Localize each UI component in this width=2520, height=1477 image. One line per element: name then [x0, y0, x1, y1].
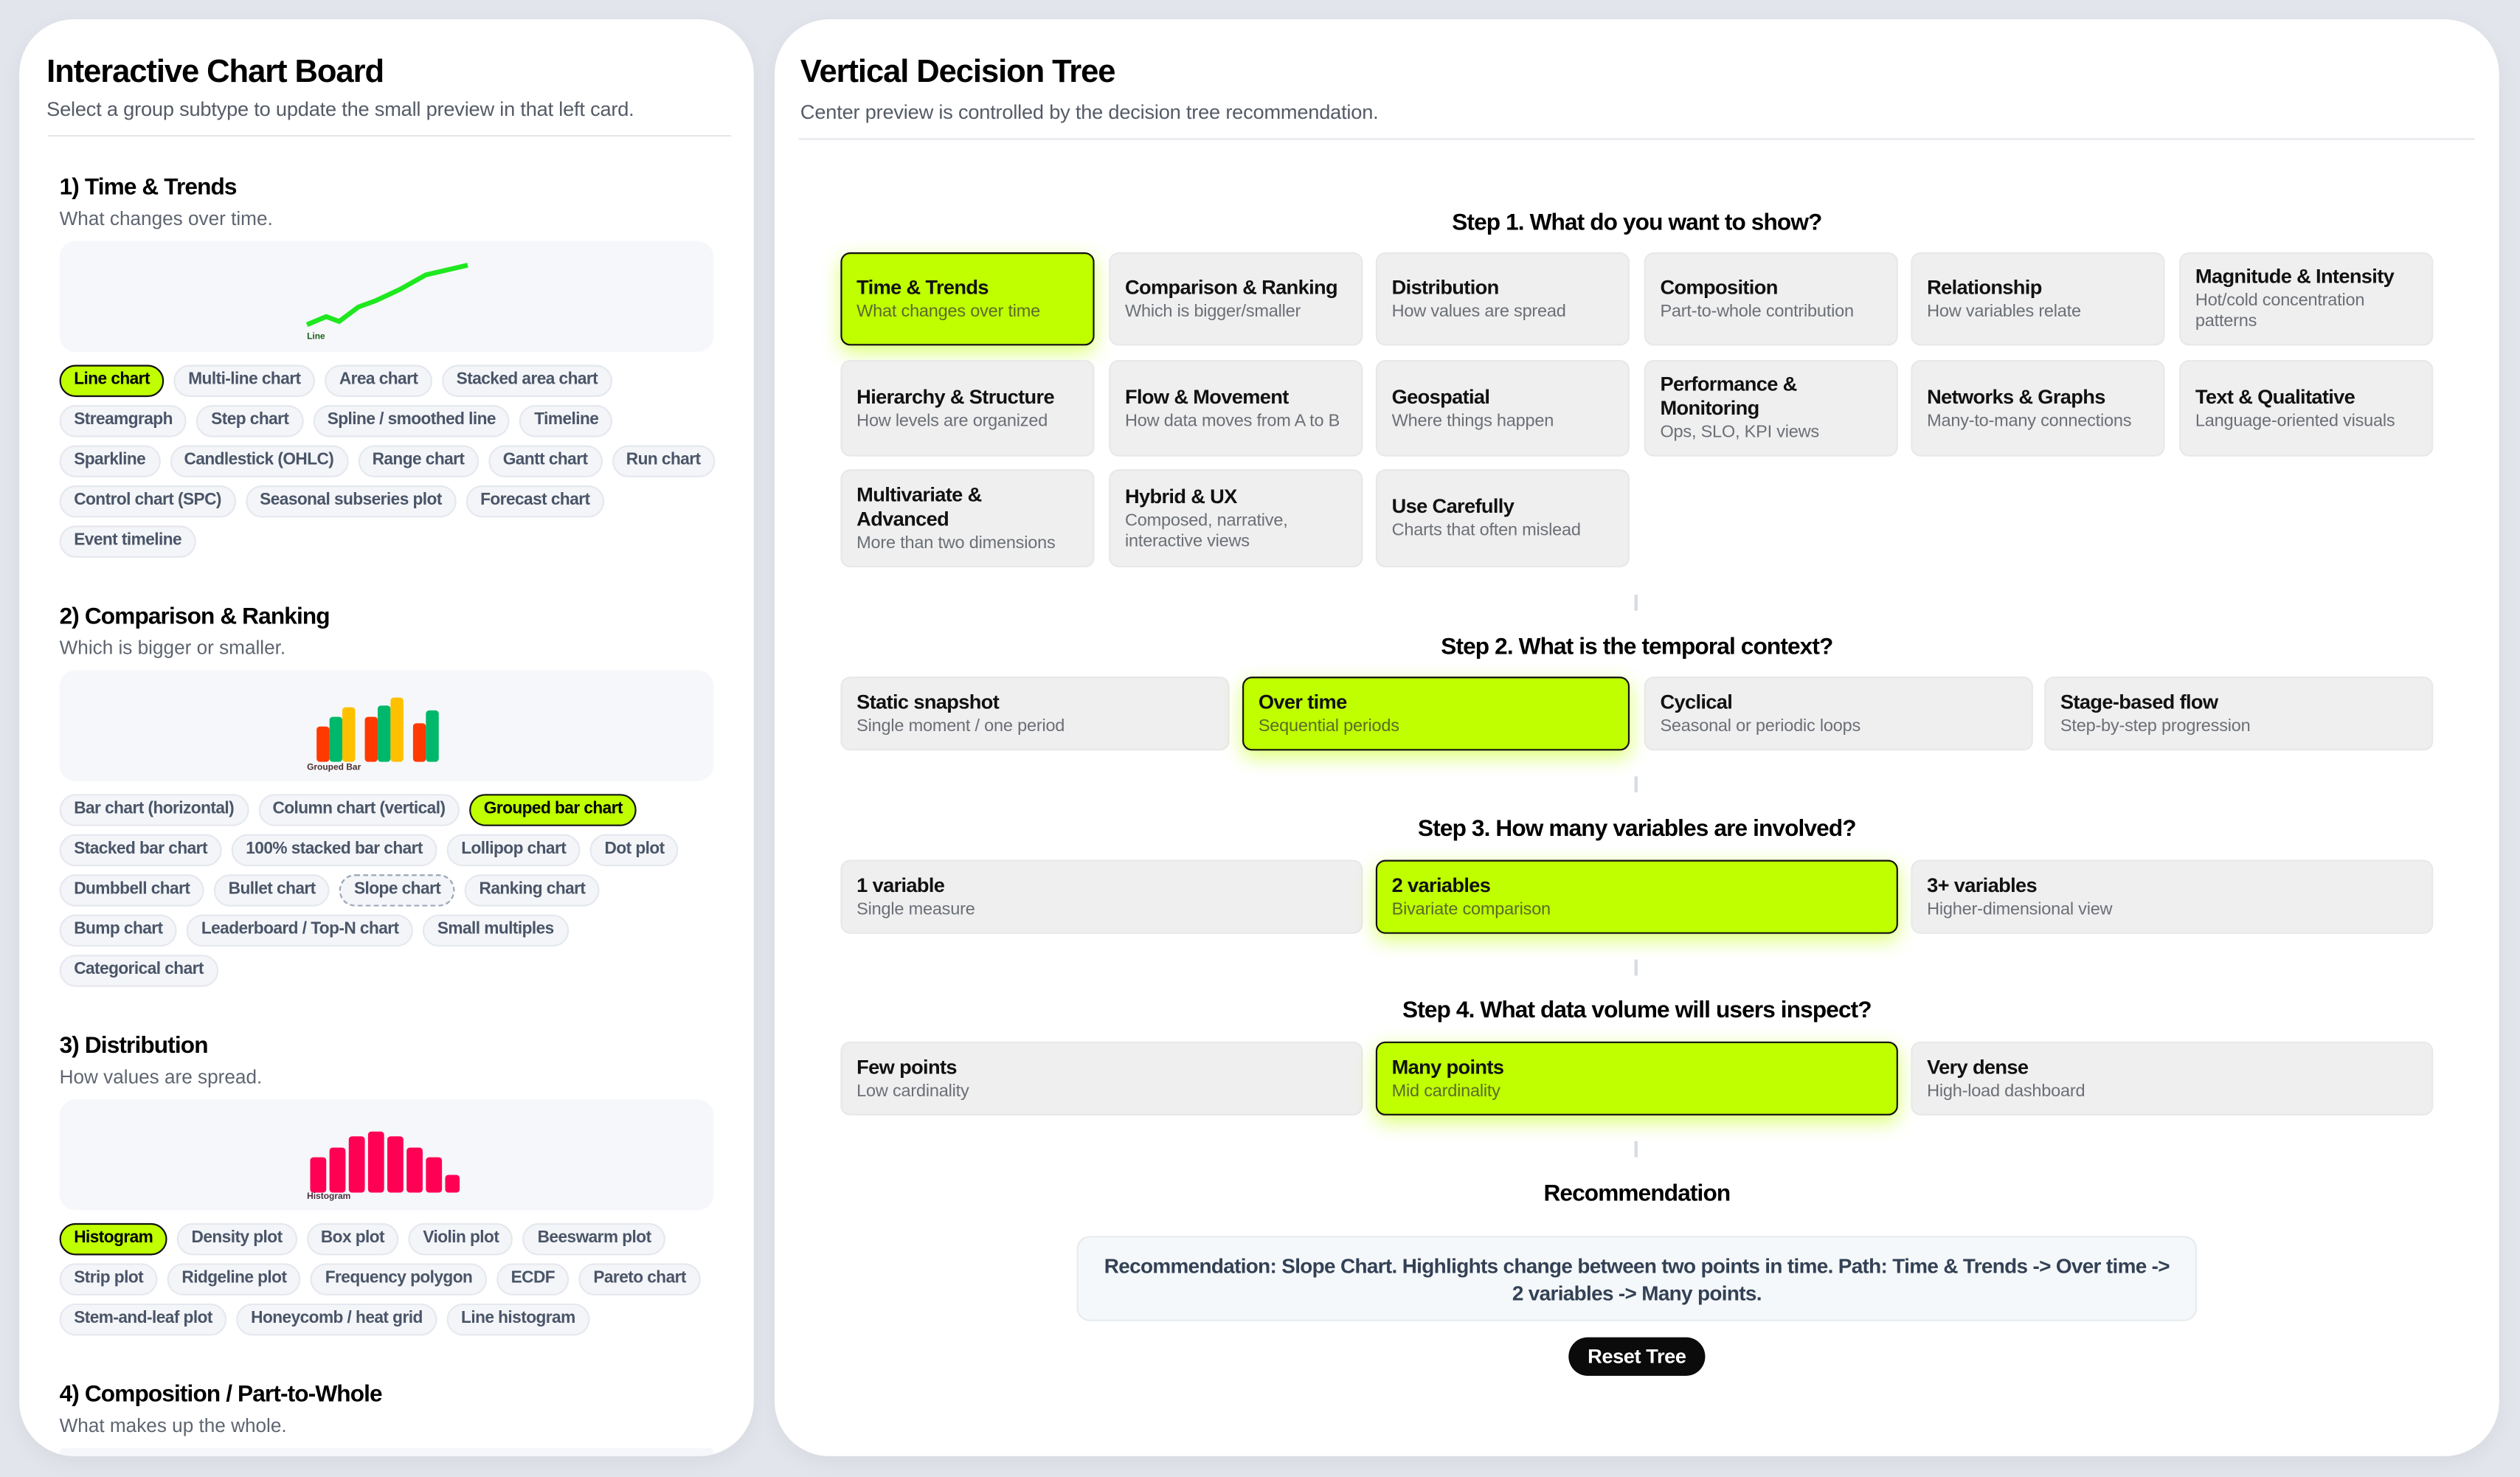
step 1 options: Comparison & Ranking [1125, 276, 1337, 298]
step 1 options: Text & Qualitative [2195, 385, 2355, 407]
step 1 options: Magnitude & Intensity [2195, 265, 2394, 288]
step 1 options: Hot/cold concentration patterns [2195, 291, 2364, 331]
title: Interactive Chart Board: Interactive Chart Board [46, 55, 384, 90]
step 1 options: What changes over time [856, 301, 1040, 321]
chips: distribution: Histogram [74, 1230, 153, 1248]
step 3 options [841, 852, 2433, 955]
section: Composition: 4) Composition / Part-to-Whole [60, 1383, 382, 1408]
step 1 options: Hierarchy & Structure [856, 385, 1054, 407]
chips: comparison: Ranking chart [480, 881, 585, 899]
step 1 options: Where things happen [1392, 411, 1554, 430]
chips: distribution: Strip plot [74, 1270, 143, 1287]
chips: distribution: Honeycomb / heat grid [251, 1310, 423, 1327]
chips: distribution: Line histogram [461, 1310, 575, 1327]
recommendation box: Recommendation: Slope Chart. Highlights change between two points in time. Path: Time & Trends -> Over time -> [1104, 1253, 2170, 1277]
chips: comparison [59, 794, 679, 987]
section: Distribution: How values are spread. [60, 1065, 262, 1088]
recommendation heading: Recommendation [1543, 1181, 1730, 1207]
recommendation box [1077, 1236, 2197, 1321]
chips: distribution: Frequency polygon [325, 1270, 472, 1287]
chips: comparison: Bump chart [74, 921, 163, 938]
panel: interactive chart board [19, 19, 754, 1456]
chips: comparison: Categorical chart [74, 961, 204, 979]
step 1 options: How variables relate [1927, 301, 2081, 321]
chips: comparison: Slope chart [354, 881, 440, 899]
step 1 options: Distribution [1392, 276, 1499, 298]
chips: distribution: Stem-and-leaf plot [74, 1310, 212, 1327]
chips: time & trends: Event timeline [74, 532, 181, 550]
chips: distribution: ECDF [511, 1270, 555, 1287]
preview: line chart: Line [307, 331, 325, 342]
chips: comparison: Dot plot [605, 840, 665, 858]
step 1 options: Composition [1660, 276, 1778, 298]
chips: comparison: Column chart (vertical) [272, 800, 445, 818]
step 2 options: Static snapshot [856, 691, 999, 713]
chips: time & trends: Sparkline [74, 452, 145, 469]
chips: distribution: Beeswarm plot [538, 1230, 651, 1248]
chips: distribution: Box plot [321, 1230, 384, 1248]
step 1 options: Composed, narrative, interactive views [1125, 511, 1288, 550]
step 4 options [841, 1034, 2433, 1136]
step 4 options: High-load dashboard [1927, 1081, 2085, 1100]
chips: time & trends: Step chart [211, 412, 288, 429]
chips: comparison: Bar chart (horizontal) [74, 800, 234, 818]
step 2 heading: Step 2. What is the temporal context? [1441, 635, 1832, 660]
step 3 options: Bivariate comparison [1392, 899, 1551, 919]
chips: distribution [59, 1223, 701, 1335]
title: Vertical Decision Tree: Vertical Decision Tree [800, 55, 1115, 90]
step 1 options: How values are spread [1392, 301, 1566, 321]
step 1 options: Part-to-whole contribution [1660, 301, 1854, 321]
button: Reset Tree: Reset Tree [1588, 1345, 1686, 1368]
chips: comparison: Lollipop chart [461, 840, 566, 858]
step 1 options: More than two dimensions [856, 533, 1056, 552]
chips: time & trends: Streamgraph [74, 412, 173, 429]
section: Time & Trends: 1) Time & Trends [60, 175, 237, 201]
step 1 options: Time & Trends [856, 276, 989, 298]
step 1 options: Language-oriented visuals [2195, 411, 2395, 430]
chips: time & trends: Range chart [373, 452, 464, 469]
chips: time & trends: Run chart [626, 452, 701, 469]
chips: comparison: Small multiples [437, 921, 554, 938]
preview: histogram: Histogram [307, 1191, 350, 1201]
section: Composition: What makes up the whole. [60, 1414, 287, 1437]
step 1 options: How data moves from A to B [1125, 411, 1340, 430]
step 2 options: Over time [1259, 691, 1347, 713]
subtitle: Select a group subtype to update the small preview in that left card. [46, 98, 634, 120]
step 1 options: Charts that often mislead [1392, 521, 1581, 540]
step 1 options: Performance & Monitoring [1660, 373, 1797, 420]
step 4 options: Few points [856, 1055, 957, 1078]
step 1 options: Ops, SLO, KPI views [1660, 423, 1819, 442]
step 1 heading: Step 1. What do you want to show? [1452, 210, 1821, 236]
chips: time & trends: Candlestick (OHLC) [184, 452, 333, 469]
step 3 options: 3+ variables [1927, 874, 2037, 896]
step 4 options: Many points [1392, 1055, 1503, 1078]
section: Distribution [60, 1034, 262, 1088]
step 4 options: Mid cardinality [1392, 1081, 1500, 1100]
step 2 options: Sequential periods [1259, 716, 1399, 736]
step 4 options: Very dense [1927, 1055, 2028, 1078]
step 3 options: Higher-dimensional view [1927, 899, 2112, 919]
step 1 options: Relationship [1927, 276, 2042, 298]
chips: time & trends: Stacked area chart [457, 371, 598, 389]
step 4 heading: Step 4. What data volume will users inspect? [1402, 998, 1872, 1024]
chips: time & trends: Multi-line chart [188, 371, 301, 389]
section: Composition [59, 1383, 382, 1437]
step 2 options [841, 668, 2433, 772]
preview: grouped bar: Grouped Bar [307, 762, 361, 772]
step 1 options: Many-to-many connections [1927, 411, 2131, 430]
chips: time & trends [59, 364, 716, 558]
preview: line chart [60, 241, 713, 352]
step 1 options: Geospatial [1392, 385, 1489, 407]
section: Comparison & Ranking: 2) Comparison & Ranking [60, 604, 330, 630]
step 1 options: Which is bigger/smaller [1125, 301, 1301, 321]
step 2 options: Stage-based flow [2060, 691, 2218, 713]
panel: vertical decision tree [775, 19, 2499, 1456]
chips: comparison: 100% stacked bar chart [246, 840, 423, 858]
step 1 options: Multivariate & [856, 483, 982, 505]
chips: distribution: Ridgeline plot [181, 1270, 286, 1287]
step 2 options: Single moment / one period [856, 716, 1065, 736]
button: Reset Tree [1568, 1338, 1705, 1376]
chips: comparison: Leaderboard / Top-N chart [201, 921, 399, 938]
chips: distribution: Density plot [192, 1230, 283, 1248]
chips: comparison: Grouped bar chart [484, 800, 623, 818]
chips: time & trends: Line chart [74, 371, 150, 389]
step 1 options [826, 245, 2433, 567]
step 1 options: Advanced [856, 507, 949, 530]
section: Comparison & Ranking [59, 604, 330, 659]
step 3 heading: Step 3. How many variables are involved? [1418, 817, 1856, 843]
section: Time & Trends: What changes over time. [60, 207, 273, 230]
step 2 options: Cyclical [1660, 691, 1732, 713]
chips: time & trends: Gantt chart [503, 452, 588, 469]
step 1 options: How levels are organized [856, 411, 1048, 430]
step 3 options: 1 variable [856, 874, 944, 896]
step 3 options: 2 variables [1392, 874, 1490, 896]
step 1 options: Networks & Graphs [1927, 385, 2105, 407]
recommendation box: 2 variables -> Many points. [1512, 1280, 1762, 1304]
chips: time & trends: Control chart (SPC) [74, 492, 221, 510]
step 2 options: Step-by-step progression [2060, 716, 2251, 736]
step 2 options: Seasonal or periodic loops [1660, 716, 1860, 736]
chips: comparison: Bullet chart [229, 881, 316, 899]
chips: time & trends: Area chart [339, 371, 418, 389]
chips: comparison: Dumbbell chart [74, 881, 190, 899]
step 1 options: Use Carefully [1392, 495, 1514, 517]
chips: time & trends: Seasonal subseries plot [260, 492, 442, 510]
step 3 options: Single measure [856, 899, 975, 919]
subtitle: Center preview is controlled by the decision tree recommendation. [800, 101, 1378, 124]
step 4 options: Low cardinality [856, 1081, 969, 1100]
step 1 options: Hybrid & UX [1125, 485, 1237, 507]
chips: distribution: Violin plot [423, 1230, 499, 1248]
section: Comparison & Ranking: Which is bigger or smaller. [60, 637, 285, 659]
chips: comparison: Stacked bar chart [74, 840, 207, 858]
preview: grouped bar [60, 670, 713, 781]
chips: time & trends: Spline / smoothed line [328, 412, 496, 429]
chips: time & trends: Timeline [534, 412, 598, 429]
section: Time & Trends [59, 175, 273, 230]
chips: time & trends: Forecast chart [480, 492, 590, 510]
chips: distribution: Pareto chart [593, 1270, 686, 1287]
section: Distribution: 3) Distribution [60, 1034, 208, 1059]
preview: histogram [60, 1099, 713, 1210]
step 1 options: Flow & Movement [1125, 385, 1289, 407]
